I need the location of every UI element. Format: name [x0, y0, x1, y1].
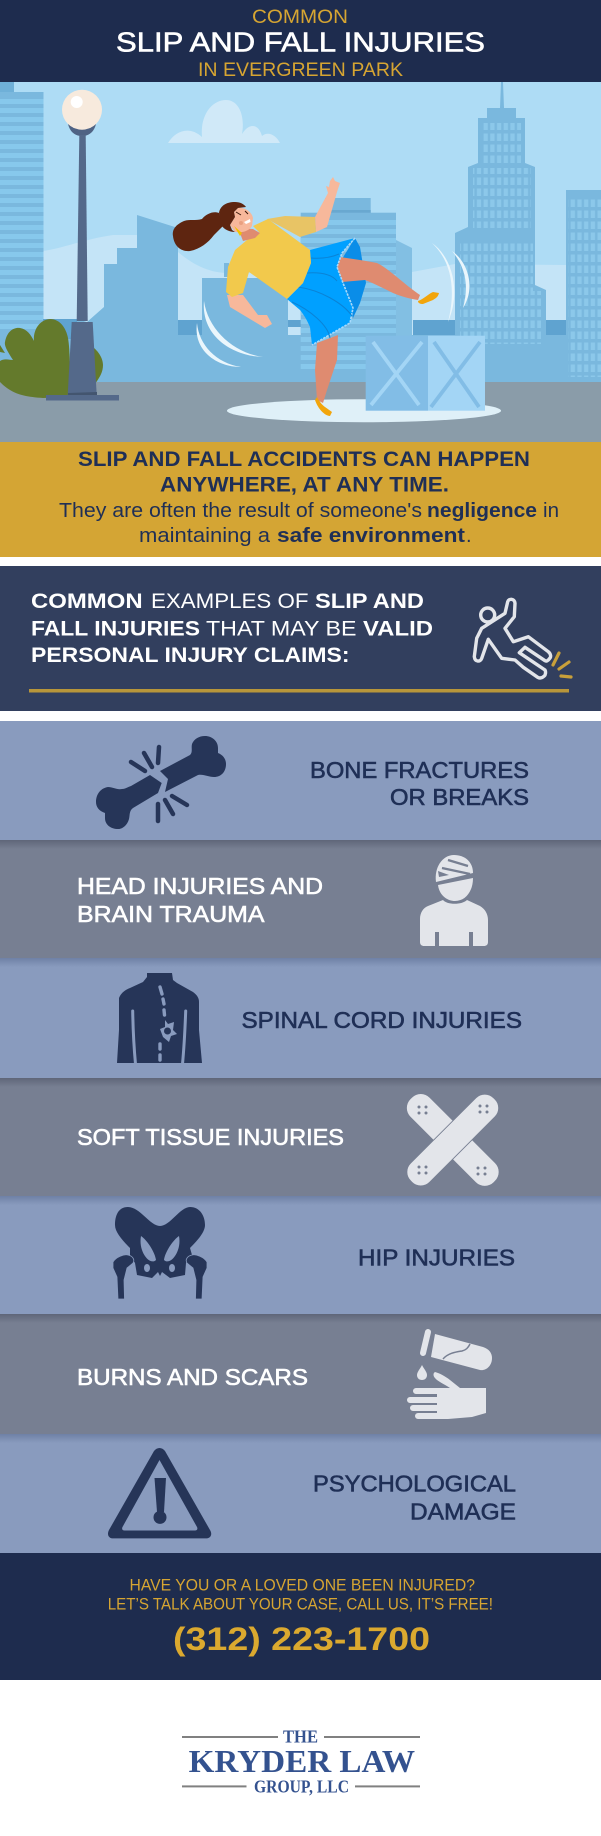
statement body: negligence — [427, 500, 537, 522]
earring — [234, 226, 242, 236]
raised shoe — [418, 292, 439, 304]
call to action text: LET’S TALK ABOUT YOUR CASE, CALL US, IT’S FREE! — [108, 1595, 493, 1614]
list row: burns and scars — [0, 1314, 601, 1434]
label — [313, 1471, 516, 1524]
neck — [238, 228, 260, 241]
label: HEAD INJURIES AND — [77, 873, 323, 899]
ponytail — [173, 212, 223, 251]
statement headline: ANYWHERE, AT ANY TIME. — [160, 474, 449, 497]
sky — [0, 82, 601, 442]
skyscraper right — [455, 82, 546, 382]
header banner — [0, 0, 601, 82]
panel heading: FALL INJURIES — [31, 618, 200, 640]
icon: crossed bandages — [402, 1089, 504, 1191]
label: BURNS AND SCARS — [77, 1364, 308, 1390]
label — [310, 757, 529, 810]
list row: head injuries — [0, 840, 601, 958]
striped centre building — [301, 198, 412, 382]
bush — [0, 319, 103, 398]
gold divider — [29, 689, 569, 692]
hair — [219, 202, 246, 232]
skirt front — [287, 238, 355, 345]
logo: the kryder law group: KRYDER LAW — [189, 1743, 415, 1779]
list row: soft tissue injuries — [0, 1078, 601, 1196]
illustration: woman slipping in city street — [0, 82, 601, 442]
dark block behind bush — [43, 319, 77, 339]
panel heading: COMMON — [31, 590, 143, 613]
statement body — [59, 500, 559, 547]
panel heading: THAT MAY BE — [206, 618, 356, 640]
logo: the kryder law group: GROUP, LLC — [254, 1777, 349, 1797]
statement headline — [78, 448, 530, 497]
call to action text: HAVE YOU OR A LOVED ONE BEEN INJURED? — [130, 1576, 475, 1595]
icon: bandaged head — [420, 855, 488, 946]
label — [77, 873, 323, 927]
label: PSYCHOLOGICAL — [313, 1471, 516, 1497]
icon: falling person — [474, 599, 551, 678]
icon: pelvis — [113, 1207, 207, 1299]
cheek — [239, 221, 243, 225]
crates — [366, 336, 485, 411]
panel heading: EXAMPLES OF — [151, 590, 308, 613]
list row: hip injuries — [0, 1196, 601, 1314]
mouth — [244, 219, 250, 224]
panel: common examples — [0, 566, 601, 711]
panel: intro statement — [0, 442, 601, 557]
street lamp — [46, 90, 119, 400]
icon: broken bone — [96, 736, 226, 829]
low buildings — [178, 263, 601, 382]
icon: chemical on hand — [410, 1332, 492, 1419]
standing leg — [315, 335, 338, 403]
list row: spinal cord injuries — [0, 958, 601, 1078]
heading: common: COMMON — [252, 7, 348, 28]
label: DAMAGE — [410, 1498, 516, 1524]
raised leg — [337, 257, 420, 300]
far right building — [566, 190, 601, 382]
panel heading: SLIP AND — [315, 590, 424, 613]
list row: bone fractures — [0, 721, 601, 840]
label: BONE FRACTURES — [310, 757, 529, 783]
icon: impact marks — [553, 653, 571, 677]
logo: the kryder law group — [182, 1727, 420, 1797]
statement body: safe environment — [277, 525, 465, 547]
panel heading: VALID — [363, 618, 433, 640]
call to action footer — [0, 1553, 601, 1680]
skirt back — [337, 238, 366, 318]
label: OR BREAKS — [390, 784, 529, 810]
label: BRAIN TRAUMA — [77, 901, 265, 927]
icon: warning triangle — [108, 1448, 211, 1538]
torso — [226, 219, 311, 299]
upper arm — [315, 177, 340, 232]
woman slipping — [173, 177, 439, 416]
puddle — [227, 399, 501, 422]
call to action text — [108, 1576, 493, 1614]
heading: slip and fall injuries: SLIP AND FALL INJURIES — [116, 27, 485, 58]
logo: the kryder law group: THE — [283, 1727, 318, 1747]
label: SOFT TISSUE INJURIES — [77, 1124, 344, 1150]
statement body: maintaining a — [139, 525, 271, 547]
motion lines — [197, 243, 469, 367]
panel heading: PERSONAL INJURY CLAIMS: — [31, 644, 350, 667]
road — [0, 382, 601, 442]
sleeve — [267, 216, 316, 237]
statement body: They are often the result of someone's — [59, 500, 422, 522]
icon: back with spine — [117, 973, 202, 1064]
face — [230, 208, 253, 232]
statement body: . — [466, 525, 472, 547]
left tower — [0, 82, 44, 332]
list row: psychological damage — [0, 1434, 601, 1553]
statement headline: SLIP AND FALL ACCIDENTS CAN HAPPEN — [78, 448, 530, 471]
standing shoe — [315, 397, 332, 416]
distant hills — [43, 235, 601, 345]
cloud — [168, 100, 280, 143]
label: HIP INJURIES — [358, 1245, 515, 1271]
statement body: in — [543, 500, 559, 522]
eyes — [236, 211, 248, 215]
lower arm — [227, 295, 272, 328]
panel heading — [31, 590, 433, 667]
heading: in evergreen park: IN EVERGREEN PARK — [198, 60, 403, 81]
stepped building — [0, 215, 178, 382]
label: SPINAL CORD INJURIES — [242, 1007, 522, 1033]
phone number: (312) 223-1700 — [173, 1621, 430, 1657]
